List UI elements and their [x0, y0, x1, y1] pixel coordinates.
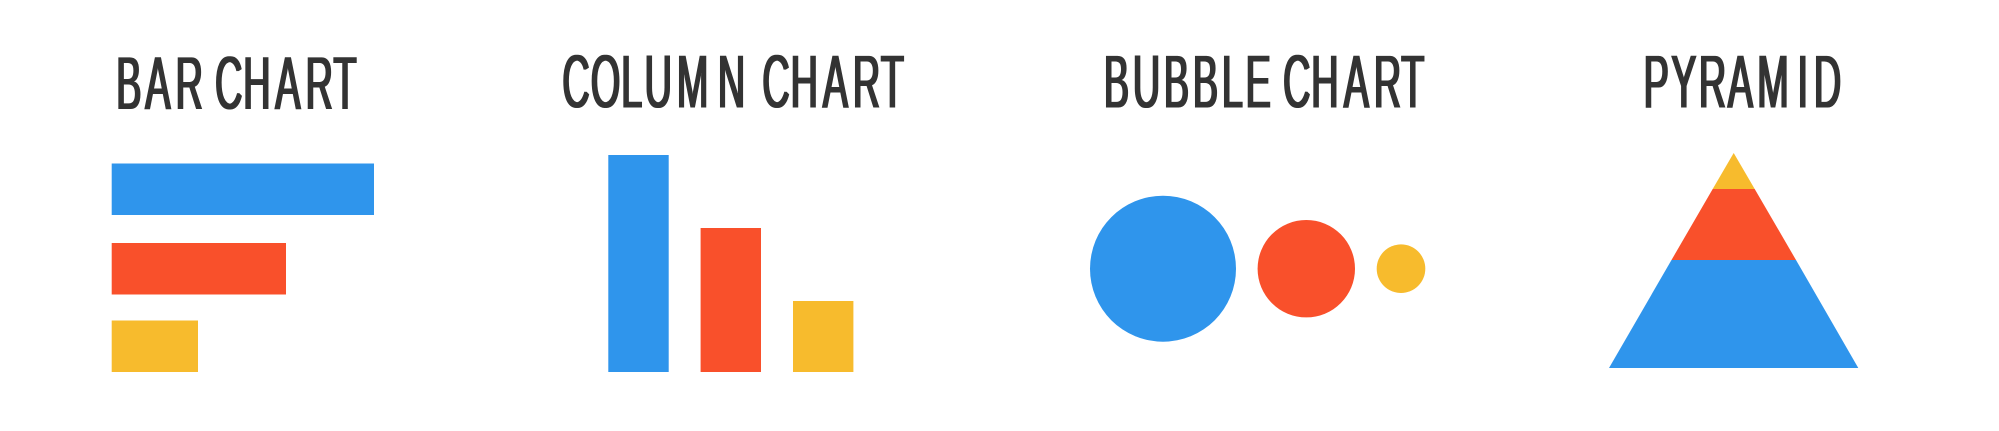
pyramid tier: blue base	[1609, 260, 1858, 368]
heading: column chart: COLUMN CHART	[562, 39, 904, 124]
bar: yellow	[112, 320, 198, 372]
heading: bubble chart: BUBBLE CHART	[1104, 39, 1424, 124]
column: yellow	[793, 301, 853, 372]
column: red	[701, 228, 761, 372]
pyramid tier: yellow top	[1713, 153, 1755, 189]
bubble: red	[1258, 220, 1355, 317]
heading: bar chart: BAR CHART	[116, 41, 357, 125]
bar: red	[112, 243, 286, 294]
panel: bar chart	[112, 41, 374, 372]
bar: blue	[112, 164, 374, 215]
pyramid tier: red middle	[1672, 189, 1796, 260]
bubble: blue	[1090, 196, 1236, 342]
heading: pyramid: PYRAMID	[1644, 39, 1841, 124]
panel: bubble chart	[1090, 39, 1425, 342]
panel: column chart	[562, 39, 904, 372]
bubble: yellow	[1377, 244, 1425, 293]
panel: pyramid	[1609, 39, 1858, 368]
column: blue	[608, 155, 669, 372]
